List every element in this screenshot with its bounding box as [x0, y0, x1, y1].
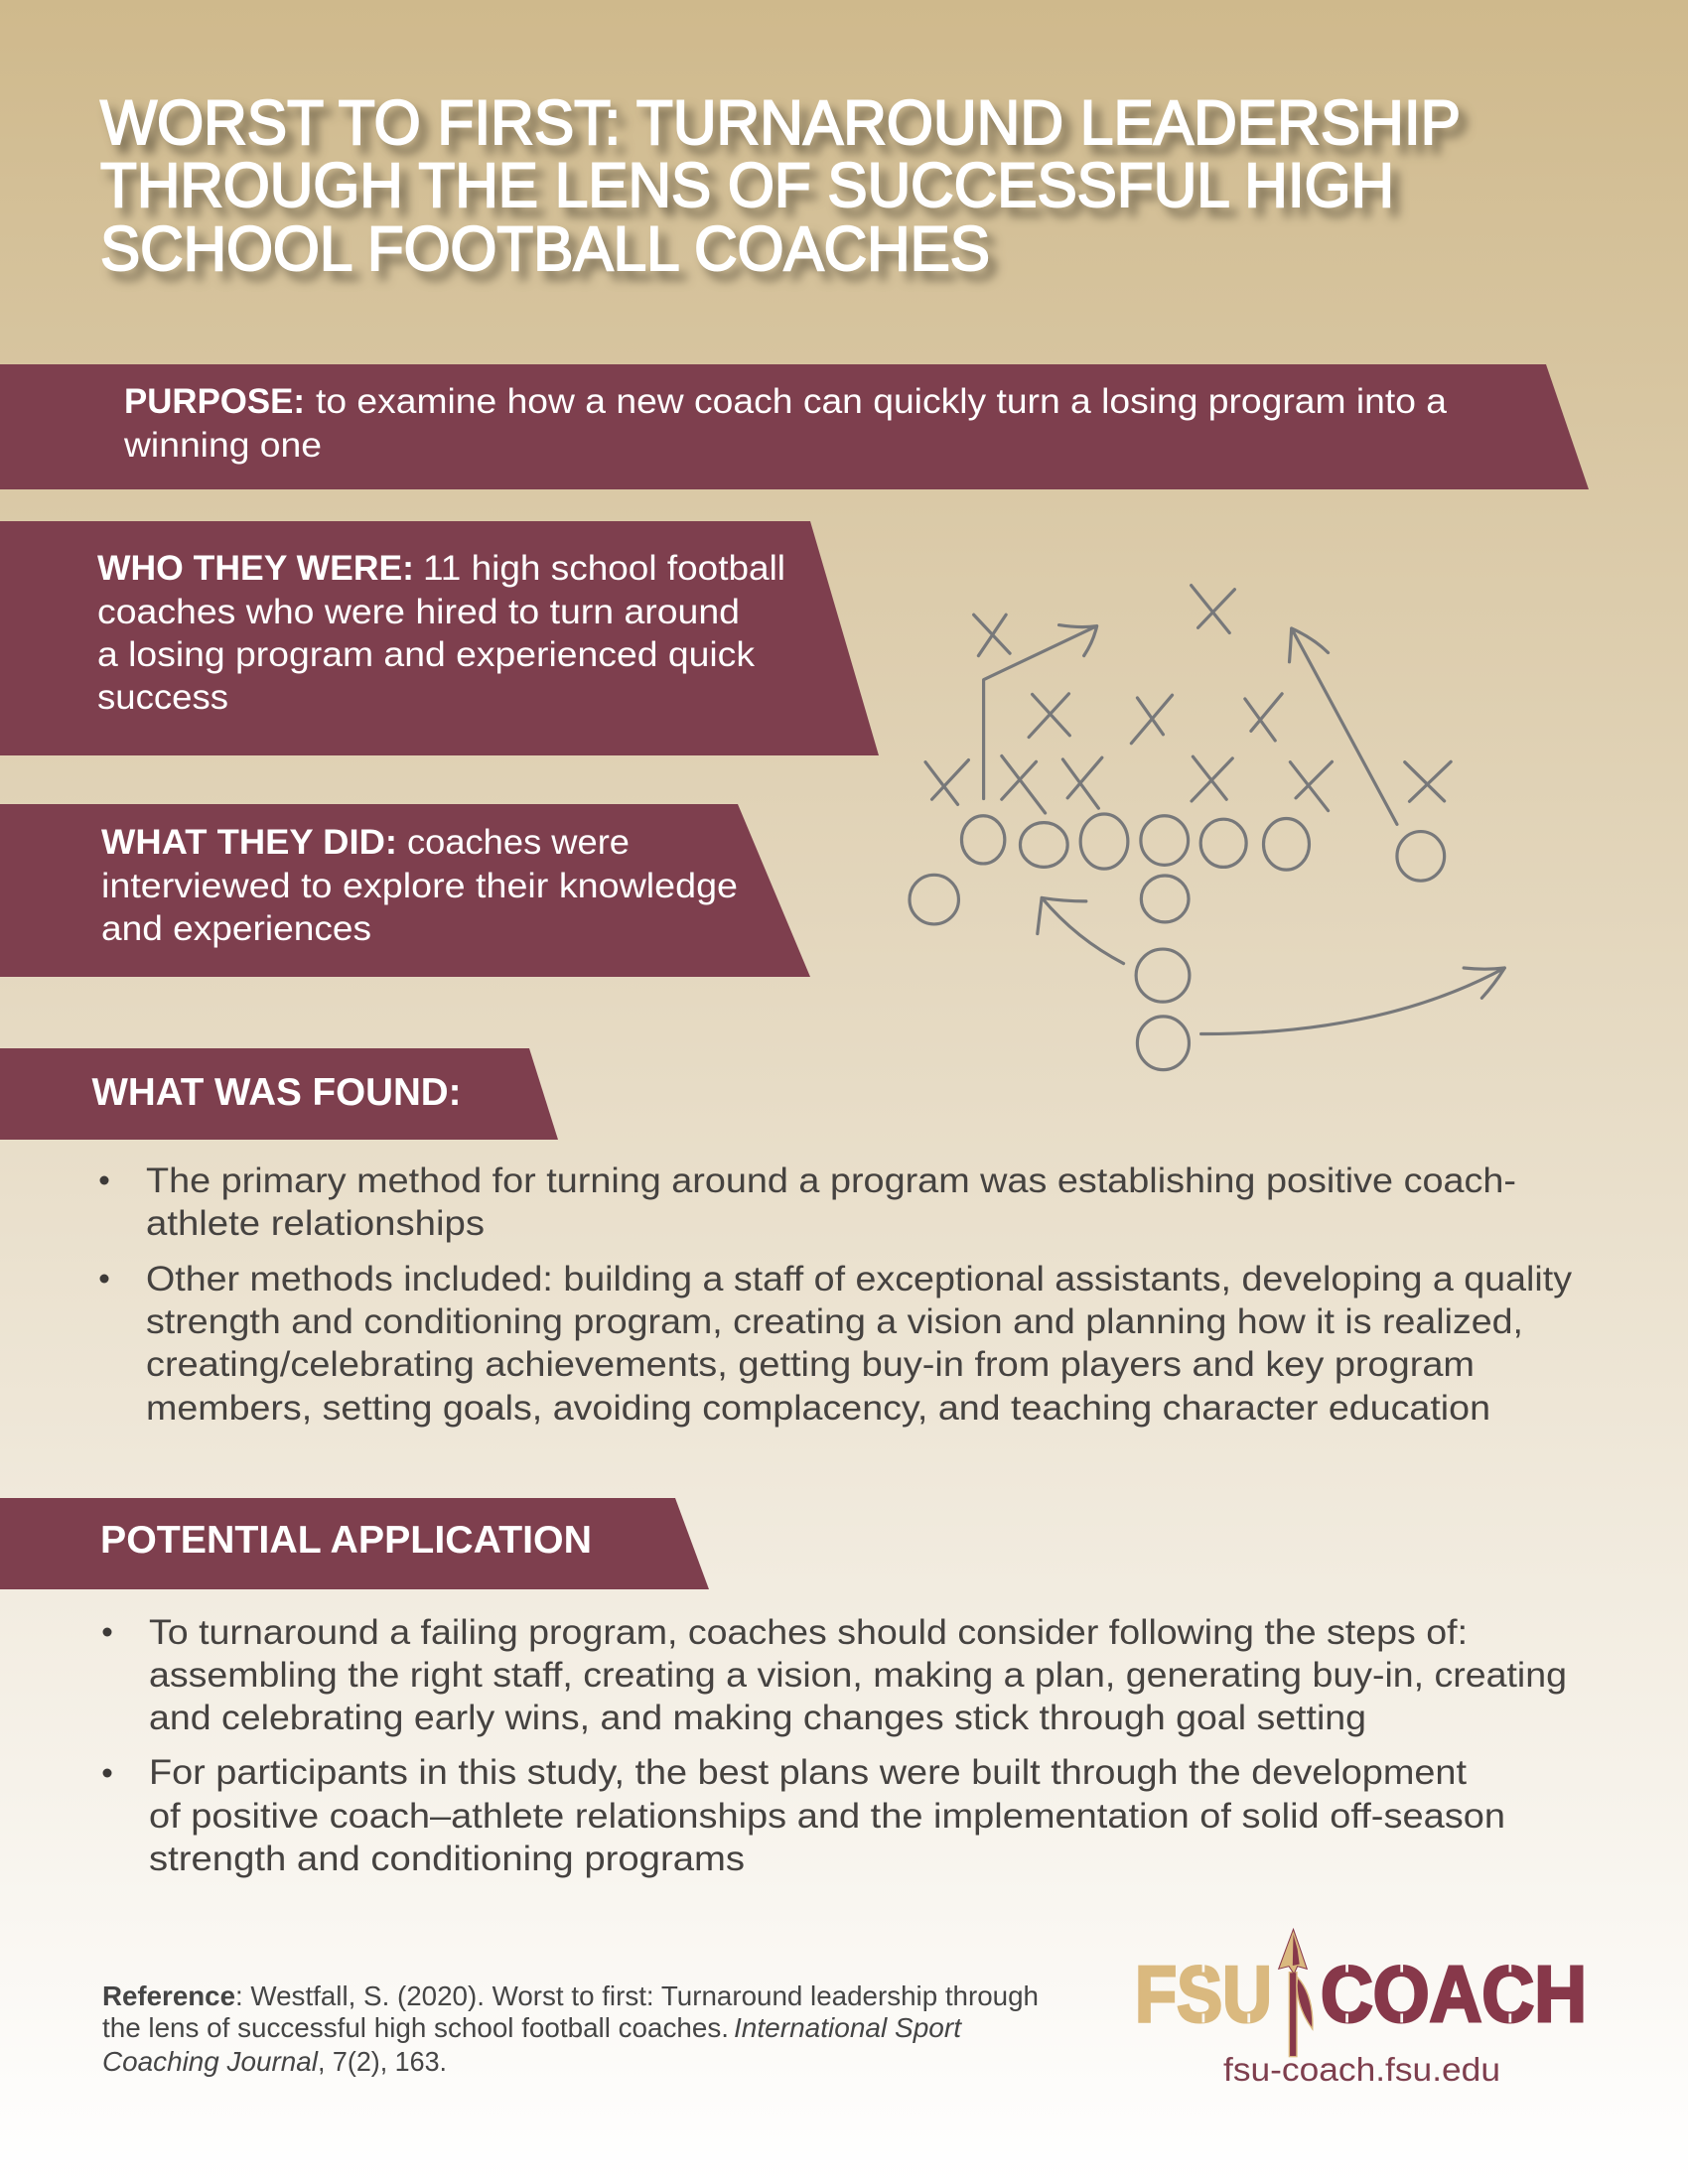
panel: what they did: interviewed to explore their knowledge: [101, 867, 738, 905]
title: [100, 88, 1461, 284]
text block: application list: of positive coach–athlete relationships and the implementation of solid off-season: [149, 1797, 1505, 1836]
text block: application list: [103, 1613, 1567, 1878]
panel: who they were: coaches who were hired to turn around: [97, 593, 740, 631]
text block: findings list: [99, 1161, 1573, 1428]
text block: findings list: creating/celebrating achievements, getting buy-in from players and key program: [146, 1345, 1475, 1384]
panel: purpose: [0, 364, 1589, 489]
chart: football play diagram: [910, 586, 1504, 1070]
reference citation: , 7(2), 163.: [318, 2046, 447, 2077]
text block: findings list: Other methods included: building a staff of exceptional assistants, developing a quality: [146, 1260, 1573, 1298]
heading: what was found: WHAT WAS FOUND:: [91, 1071, 461, 1114]
logo: FSU Coach: FSU: [1135, 1950, 1272, 2038]
heading: potential application: POTENTIAL APPLICATION: [100, 1519, 592, 1562]
panel: purpose: to examine how a new coach can quickly turn a losing program into a: [316, 382, 1448, 421]
text block: findings list: strength and conditioning program, creating a vision and planning how it is realized,: [146, 1302, 1523, 1341]
text block: application list: assembling the right staff, creating a vision, making a plan, generating buy-in, creating: [149, 1656, 1567, 1695]
reference citation: Coaching Journal: [102, 2046, 319, 2077]
text block: findings list: members, setting goals, avoiding complacency, and teaching character education: [146, 1389, 1490, 1428]
reference citation: the lens of successful high school football coaches.: [102, 2012, 729, 2043]
title: THROUGH THE LENS OF SUCCESSFUL HIGH: [100, 151, 1394, 220]
logo: FSU Coach: fsu-coach.fsu.edu: [1223, 2051, 1500, 2088]
panel: who they were: 11 high school football: [423, 549, 785, 588]
reference citation: : Westfall, S. (2020). Worst to first: Turnaround leadership through: [235, 1980, 1039, 2011]
panel: who they were: WHO THEY WERE:: [97, 549, 414, 588]
reference citation: Reference: [102, 1980, 235, 2011]
panel: who they were: [0, 521, 879, 755]
panel: purpose: winning one: [123, 426, 322, 465]
text block: findings list: athlete relationships: [146, 1204, 485, 1243]
panel: what they did: WHAT THEY DID:: [101, 823, 397, 862]
text block: findings list: The primary method for turning around a program was establishing positive coach-: [146, 1161, 1516, 1200]
logo: FSU Coach: [1135, 1929, 1587, 2088]
panel: what they did: [0, 804, 810, 977]
text block: application list: strength and conditioning programs: [149, 1840, 745, 1878]
heading: potential application: [0, 1498, 709, 1589]
reference citation: [102, 1980, 1039, 2077]
heading: what was found: [0, 1048, 558, 1140]
reference citation: International Sport: [734, 2012, 962, 2043]
text block: application list: For participants in this study, the best plans were built through the development: [149, 1753, 1467, 1792]
text block: application list: To turnaround a failing program, coaches should consider following the steps of:: [149, 1613, 1468, 1652]
text block: application list: and celebrating early wins, and making changes stick through goal setting: [149, 1699, 1366, 1737]
panel: what they did: coaches were: [407, 823, 630, 862]
panel: purpose: PURPOSE:: [124, 382, 305, 421]
title: SCHOOL FOOTBALL COACHES: [100, 214, 990, 284]
panel: who they were: success: [97, 678, 228, 717]
logo: FSU Coach: COACH: [1321, 1950, 1587, 2038]
title: WORST TO FIRST: TURNAROUND LEADERSHIP: [100, 88, 1461, 158]
panel: what they did: and experiences: [101, 909, 371, 948]
panel: who they were: a losing program and experienced quick: [97, 635, 756, 674]
